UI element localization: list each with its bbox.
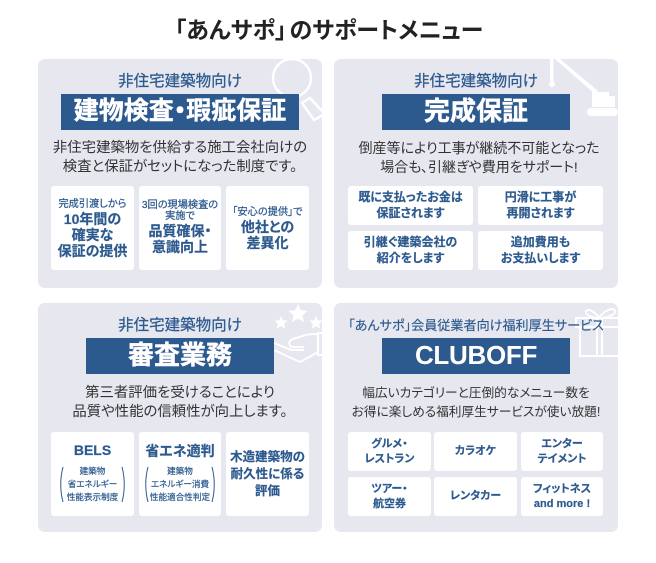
card: paid funds warranty: 既に支払ったお金は bbox=[358, 190, 463, 204]
card: gourmet bbox=[348, 432, 431, 471]
card: differentiation: 差異化 bbox=[246, 234, 288, 250]
description bbox=[358, 140, 599, 174]
banner heading bbox=[61, 94, 299, 130]
panel: building inspection and defect warranty bbox=[38, 59, 322, 288]
card: entertainment: テイメント bbox=[537, 452, 587, 464]
icon: crane bbox=[549, 59, 618, 116]
card: work resumes: 再開されます bbox=[506, 206, 575, 220]
banner heading bbox=[382, 94, 570, 130]
card: rental car bbox=[434, 477, 517, 516]
subheading: 非住宅建築物向け bbox=[118, 73, 242, 90]
card: fitness bbox=[521, 477, 603, 516]
card: wooden building durability bbox=[226, 432, 309, 516]
BELS detail bbox=[60, 466, 125, 502]
subheading: 非住宅建築物向け bbox=[414, 73, 538, 90]
banner heading: 建物検査・瑕疵保証 bbox=[74, 97, 286, 125]
description bbox=[72, 384, 288, 420]
description: 倒産等により工事が継続不可能となった bbox=[359, 140, 599, 156]
card: tours: 航空券 bbox=[373, 498, 406, 510]
icon: hand with stars bbox=[274, 304, 322, 363]
card: energy conformity: 省エネ適判 bbox=[145, 443, 215, 459]
icon: gift box bbox=[575, 308, 618, 357]
card: additional costs: 追加費用も bbox=[511, 235, 570, 249]
card: karaoke: カラオケ bbox=[455, 445, 496, 457]
description: 場合も、引継ぎや費用をサポート! bbox=[380, 158, 578, 174]
BELS detail: 性能表示制度 bbox=[67, 492, 118, 502]
description: 品質や性能の信頼性が向上します。 bbox=[72, 404, 288, 420]
card: on-site inspections: 品質確保・ bbox=[148, 223, 212, 239]
card: entertainment bbox=[521, 432, 603, 471]
card: successor company: 引継ぐ建築会社の bbox=[364, 235, 457, 249]
card: on-site inspections: 3回の現場検査の bbox=[142, 200, 218, 211]
card: wooden building durability: 木造建築物の bbox=[230, 450, 305, 464]
card: differentiation: 「安心の提供」で bbox=[232, 206, 303, 218]
description: 検査と保証がセットになった制度です。 bbox=[63, 158, 297, 174]
energy conformity detail: 建築物 bbox=[167, 466, 193, 476]
card: on-site inspections: 実施で bbox=[165, 210, 195, 222]
banner heading bbox=[86, 338, 274, 374]
card: energy conformity bbox=[139, 432, 221, 516]
card: ten year warranty bbox=[51, 186, 134, 270]
card: on-site inspections: 意識向上 bbox=[152, 239, 208, 255]
card: work resumes bbox=[478, 186, 603, 225]
card: paid funds warranty: 保証されます bbox=[376, 206, 445, 220]
description: 幅広いカテゴリーと圧倒的なメニュー数を bbox=[362, 386, 590, 400]
card: ten year warranty: 完成引渡しから bbox=[58, 198, 127, 210]
description bbox=[352, 386, 600, 418]
subheading: 非住宅建築物向け bbox=[118, 317, 242, 334]
card: differentiation: 他社との bbox=[241, 218, 294, 234]
icon: magnifying glass bbox=[272, 59, 322, 122]
card: ten year warranty: 保証の提供 bbox=[58, 242, 127, 258]
banner heading: 完成保証 bbox=[424, 96, 528, 126]
description: 非住宅建築物を供給する施工会社向けの bbox=[53, 140, 307, 156]
panel: completion warranty bbox=[334, 59, 618, 288]
card: ten year warranty: 確実な bbox=[72, 226, 113, 242]
card: ten year warranty: 10年間の bbox=[64, 210, 121, 226]
card: successor company bbox=[348, 231, 473, 270]
card: successor company: 紹介をします bbox=[377, 250, 444, 264]
description bbox=[53, 140, 307, 174]
card: on-site inspections bbox=[139, 186, 221, 270]
card: entertainment: エンター bbox=[541, 438, 583, 450]
card: tours bbox=[348, 477, 431, 516]
title: 「あんサポ」のサポートメニュー bbox=[175, 17, 483, 43]
card: differentiation bbox=[226, 186, 309, 270]
energy conformity detail: エネルギー消費 bbox=[151, 478, 209, 488]
description: お得に楽しめる福利厚生サービスが使い放題! bbox=[352, 404, 600, 418]
card: gourmet: レストラン bbox=[365, 452, 414, 464]
BELS detail: 建築物 bbox=[80, 466, 105, 476]
card: karaoke bbox=[434, 432, 517, 471]
BELS detail: 省エネルギー bbox=[68, 478, 117, 488]
card: work resumes: 円滑に工事が bbox=[505, 190, 576, 204]
panel: CLUBOFF bbox=[334, 303, 618, 532]
energy conformity detail: 性能適合性判定 bbox=[150, 492, 210, 502]
card: fitness: フィットネス bbox=[533, 483, 591, 495]
card: gourmet: グルメ・ bbox=[371, 438, 408, 450]
card: BELS bbox=[51, 432, 134, 516]
description: 第三者評価を受けることにより bbox=[85, 385, 275, 401]
energy conformity detail bbox=[145, 466, 215, 502]
card: rental car: レンタカー bbox=[450, 490, 501, 502]
subheading: 「あんサポ」会員従業者向け福利厚生サービス bbox=[348, 318, 604, 333]
card: additional costs bbox=[478, 231, 603, 270]
card: fitness: and more ! bbox=[534, 498, 590, 510]
banner heading bbox=[382, 338, 570, 374]
banner heading: 審査業務 bbox=[128, 340, 232, 370]
card: paid funds warranty bbox=[348, 186, 473, 225]
panel: review services bbox=[38, 303, 322, 532]
card: BELS: BELS bbox=[74, 442, 111, 458]
card: wooden building durability: 耐久性に係る bbox=[231, 466, 304, 480]
card: wooden building durability: 評価 bbox=[255, 484, 280, 498]
banner heading: CLUBOFF bbox=[415, 340, 537, 370]
card: tours: ツアー・ bbox=[371, 483, 408, 495]
card: additional costs: お支払いします bbox=[501, 250, 580, 264]
